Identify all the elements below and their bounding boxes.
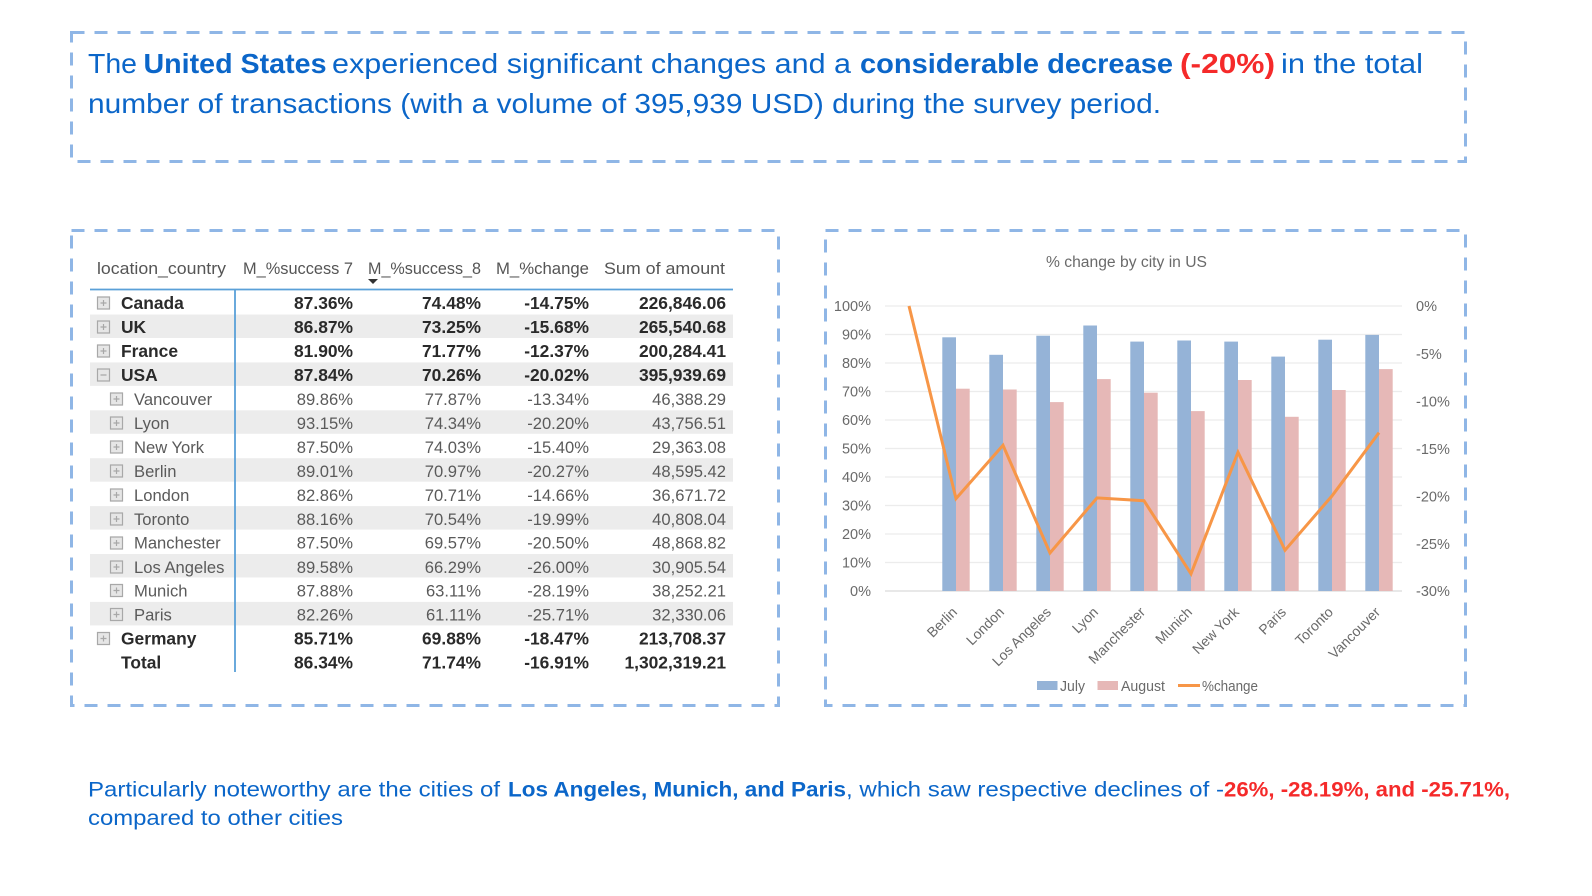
headline text: considerable decrease — [860, 48, 1173, 79]
row: Los Angeles — [110, 558, 726, 577]
row: Total: -16.91% — [524, 652, 589, 672]
table header row: M_%success_8 — [368, 260, 481, 278]
bars: July — [942, 326, 1379, 591]
row: Germany: -18.47% — [524, 628, 589, 648]
table header row: M_%success 7 — [243, 260, 353, 278]
row: UK: UK — [121, 317, 147, 337]
left axis labels: 70% — [842, 384, 871, 400]
footnote text: Los Angeles, Munich, and Paris — [508, 778, 846, 802]
row: Berlin — [110, 462, 726, 481]
row: London — [110, 486, 726, 505]
table header row: M_%change — [496, 260, 589, 278]
footnote text — [88, 778, 1510, 830]
line: %change — [909, 306, 1379, 574]
x axis city labels: Toronto — [1292, 604, 1336, 648]
row: Canada — [98, 293, 726, 313]
row: Canada: -14.75% — [524, 293, 589, 313]
left axis labels: 50% — [842, 442, 871, 458]
row: UK: 86.87% — [294, 317, 353, 337]
row: New York: 87.50% — [297, 438, 353, 457]
left axis labels: 100% — [834, 299, 871, 315]
panel: table frame — [72, 230, 778, 706]
row: Vancouver: Vancouver — [134, 390, 213, 409]
left axis labels: 90% — [842, 328, 871, 344]
row: Munich: -28.19% — [527, 582, 589, 600]
footnote text: 26%, -28.19%, and -25.71%, — [1224, 778, 1510, 802]
left axis labels: 30% — [842, 498, 871, 514]
chart: % change by city — [834, 254, 1450, 695]
row: Manchester: 87.50% — [297, 534, 353, 552]
footnote text: , which saw respective declines of - — [846, 778, 1224, 802]
row: USA: USA — [121, 365, 158, 385]
row: Toronto: 70.54% — [425, 510, 481, 529]
x axis city labels — [923, 603, 1383, 669]
x axis city labels: Berlin — [923, 604, 960, 640]
row: London: -14.66% — [527, 486, 589, 505]
left axis labels: 10% — [842, 556, 871, 572]
row: Toronto — [110, 510, 726, 529]
row: Total: Total — [121, 652, 161, 672]
row: Munich — [110, 582, 726, 600]
row: Vancouver: 46,388.29 — [652, 390, 726, 409]
left axis labels — [834, 299, 871, 600]
row: Manchester: Manchester — [134, 534, 221, 552]
row: France: France — [121, 341, 178, 361]
row: Berlin: 89.01% — [297, 462, 353, 481]
row: France: 200,284.41 — [639, 341, 726, 361]
row: Los Angeles: Los Angeles — [134, 558, 224, 577]
table zebra bands — [90, 314, 733, 625]
chart legend — [1037, 679, 1258, 695]
left axis labels: 80% — [842, 356, 871, 372]
row: Berlin: 70.97% — [425, 462, 481, 481]
row: Los Angeles: 89.58% — [297, 558, 353, 577]
row: France — [98, 341, 726, 361]
row: Manchester: -20.50% — [527, 534, 589, 552]
right axis labels: -10% — [1416, 394, 1450, 410]
row: Munich: 63.11% — [426, 582, 481, 600]
row: Paris: 82.26% — [297, 606, 353, 624]
row: Canada: 226,846.06 — [639, 293, 726, 313]
table header row: Sum of amount — [604, 260, 725, 278]
row: Los Angeles: 66.29% — [425, 558, 481, 577]
row: Berlin: Berlin — [134, 462, 176, 481]
row: Berlin: -20.27% — [527, 462, 589, 481]
headline text: The — [88, 48, 137, 79]
right axis labels: -30% — [1416, 584, 1450, 600]
row: New York: -15.40% — [527, 438, 589, 457]
left axis labels: 20% — [842, 527, 871, 543]
row: Total: 71.74% — [422, 652, 481, 672]
headline text: (-20%) — [1180, 48, 1275, 79]
row: UK: 73.25% — [422, 317, 481, 337]
row: Germany: 213,708.37 — [639, 628, 726, 648]
x axis city labels: London — [963, 604, 1007, 648]
headline text: experienced significant changes and a — [332, 48, 852, 79]
row: Manchester — [110, 534, 726, 552]
row: Vancouver: 89.86% — [297, 390, 353, 409]
x axis city labels: Vancouver — [1325, 604, 1383, 662]
row: Los Angeles: -26.00% — [527, 558, 589, 577]
panel: headline callout — [72, 32, 1466, 162]
chart legend: August — [1121, 679, 1165, 695]
footnote text: Particularly noteworthy are the cities of — [88, 778, 500, 802]
row: Germany: Germany — [121, 628, 197, 648]
chart legend: %change — [1202, 679, 1258, 695]
chart title: % change by city in US — [1046, 254, 1207, 271]
x axis city labels: Munich — [1152, 604, 1195, 647]
row: Lyon: 74.34% — [425, 414, 481, 433]
row: USA: -20.02% — [524, 365, 589, 385]
right axis labels: 0% — [1416, 299, 1437, 315]
right axis labels — [1416, 299, 1450, 600]
row: New York: New York — [134, 438, 205, 457]
row: Germany: 69.88% — [422, 628, 481, 648]
row: Toronto: 88.16% — [297, 510, 353, 529]
row: USA — [98, 365, 726, 385]
headline text: United States — [144, 48, 326, 79]
row: USA: 87.84% — [294, 365, 353, 385]
row: Paris: 61.11% — [426, 606, 481, 624]
row: Vancouver: 77.87% — [425, 390, 481, 409]
row: Canada: Canada — [121, 293, 184, 313]
right axis labels: -25% — [1416, 537, 1450, 553]
row: Lyon: Lyon — [134, 414, 169, 433]
row: Lyon: 43,756.51 — [652, 414, 726, 433]
row: Total: 86.34% — [294, 652, 353, 672]
row: Munich: 38,252.21 — [652, 582, 726, 600]
row: New York: 74.03% — [425, 438, 481, 457]
table header row — [97, 260, 725, 284]
row: Los Angeles: 30,905.54 — [652, 558, 726, 577]
row: New York — [110, 438, 726, 457]
row: Lyon: -20.20% — [527, 414, 589, 433]
table header row: location_country — [97, 260, 227, 278]
right axis labels: -20% — [1416, 490, 1450, 506]
row: Lyon — [110, 414, 726, 433]
row: Total — [121, 652, 726, 672]
x axis city labels: Paris — [1255, 604, 1289, 638]
row: UK — [98, 317, 726, 337]
left axis labels: 40% — [842, 470, 871, 486]
row: France: -12.37% — [524, 341, 589, 361]
chart legend: July — [1060, 679, 1086, 695]
right axis labels: -15% — [1416, 442, 1450, 458]
row: Germany — [98, 628, 726, 648]
left axis labels: 0% — [850, 584, 871, 600]
x axis city labels: Lyon — [1069, 604, 1101, 636]
footnote text: compared to other cities — [88, 807, 343, 830]
headline text — [88, 48, 1423, 119]
row: Germany: 85.71% — [294, 628, 353, 648]
row: Paris — [110, 606, 726, 624]
panel: chart frame — [826, 230, 1466, 706]
row: Toronto: 40,808.04 — [652, 510, 726, 529]
row: Vancouver: -13.34% — [527, 390, 589, 409]
row: USA: 395,939.69 — [639, 365, 726, 385]
row: Canada: 74.48% — [422, 293, 481, 313]
bars: August — [956, 369, 1393, 591]
row: Toronto: Toronto — [134, 510, 189, 529]
table: metrics by location — [90, 260, 733, 672]
row: London: London — [134, 486, 189, 505]
row: London: 36,671.72 — [652, 486, 726, 505]
row: Paris: 32,330.06 — [652, 606, 726, 624]
row: Canada: 87.36% — [294, 293, 353, 313]
row: France: 81.90% — [294, 341, 353, 361]
row: UK: 265,540.68 — [639, 317, 726, 337]
row: Manchester: 69.57% — [425, 534, 481, 552]
row: Toronto: -19.99% — [527, 510, 589, 529]
left axis labels: 60% — [842, 413, 871, 429]
row: UK: -15.68% — [524, 317, 589, 337]
row: France: 71.77% — [422, 341, 481, 361]
table rules — [90, 289, 733, 672]
headline text: number of transactions (with a volume of 395,939 USD) during the survey period. — [88, 88, 1161, 119]
row: Berlin: 48,595.42 — [652, 462, 726, 481]
row: New York: 29,363.08 — [652, 438, 726, 457]
row: London: 70.71% — [425, 486, 481, 505]
row: USA: 70.26% — [422, 365, 481, 385]
row: Munich: 87.88% — [297, 582, 353, 600]
row: Manchester: 48,868.82 — [652, 534, 726, 552]
row: Munich: Munich — [134, 582, 188, 600]
row: Paris: Paris — [134, 606, 172, 624]
row: London: 82.86% — [297, 486, 353, 505]
x axis city labels: New York — [1189, 603, 1243, 657]
row: Total: 1,302,319.21 — [624, 652, 726, 672]
x axis city labels: Manchester — [1085, 604, 1148, 667]
row: Paris: -25.71% — [527, 606, 589, 624]
row: Vancouver — [110, 390, 726, 409]
right axis labels: -5% — [1416, 347, 1442, 363]
row: Lyon: 93.15% — [297, 414, 353, 433]
x axis city labels: Los Angeles — [989, 604, 1054, 669]
headline text: in the total — [1281, 48, 1423, 79]
